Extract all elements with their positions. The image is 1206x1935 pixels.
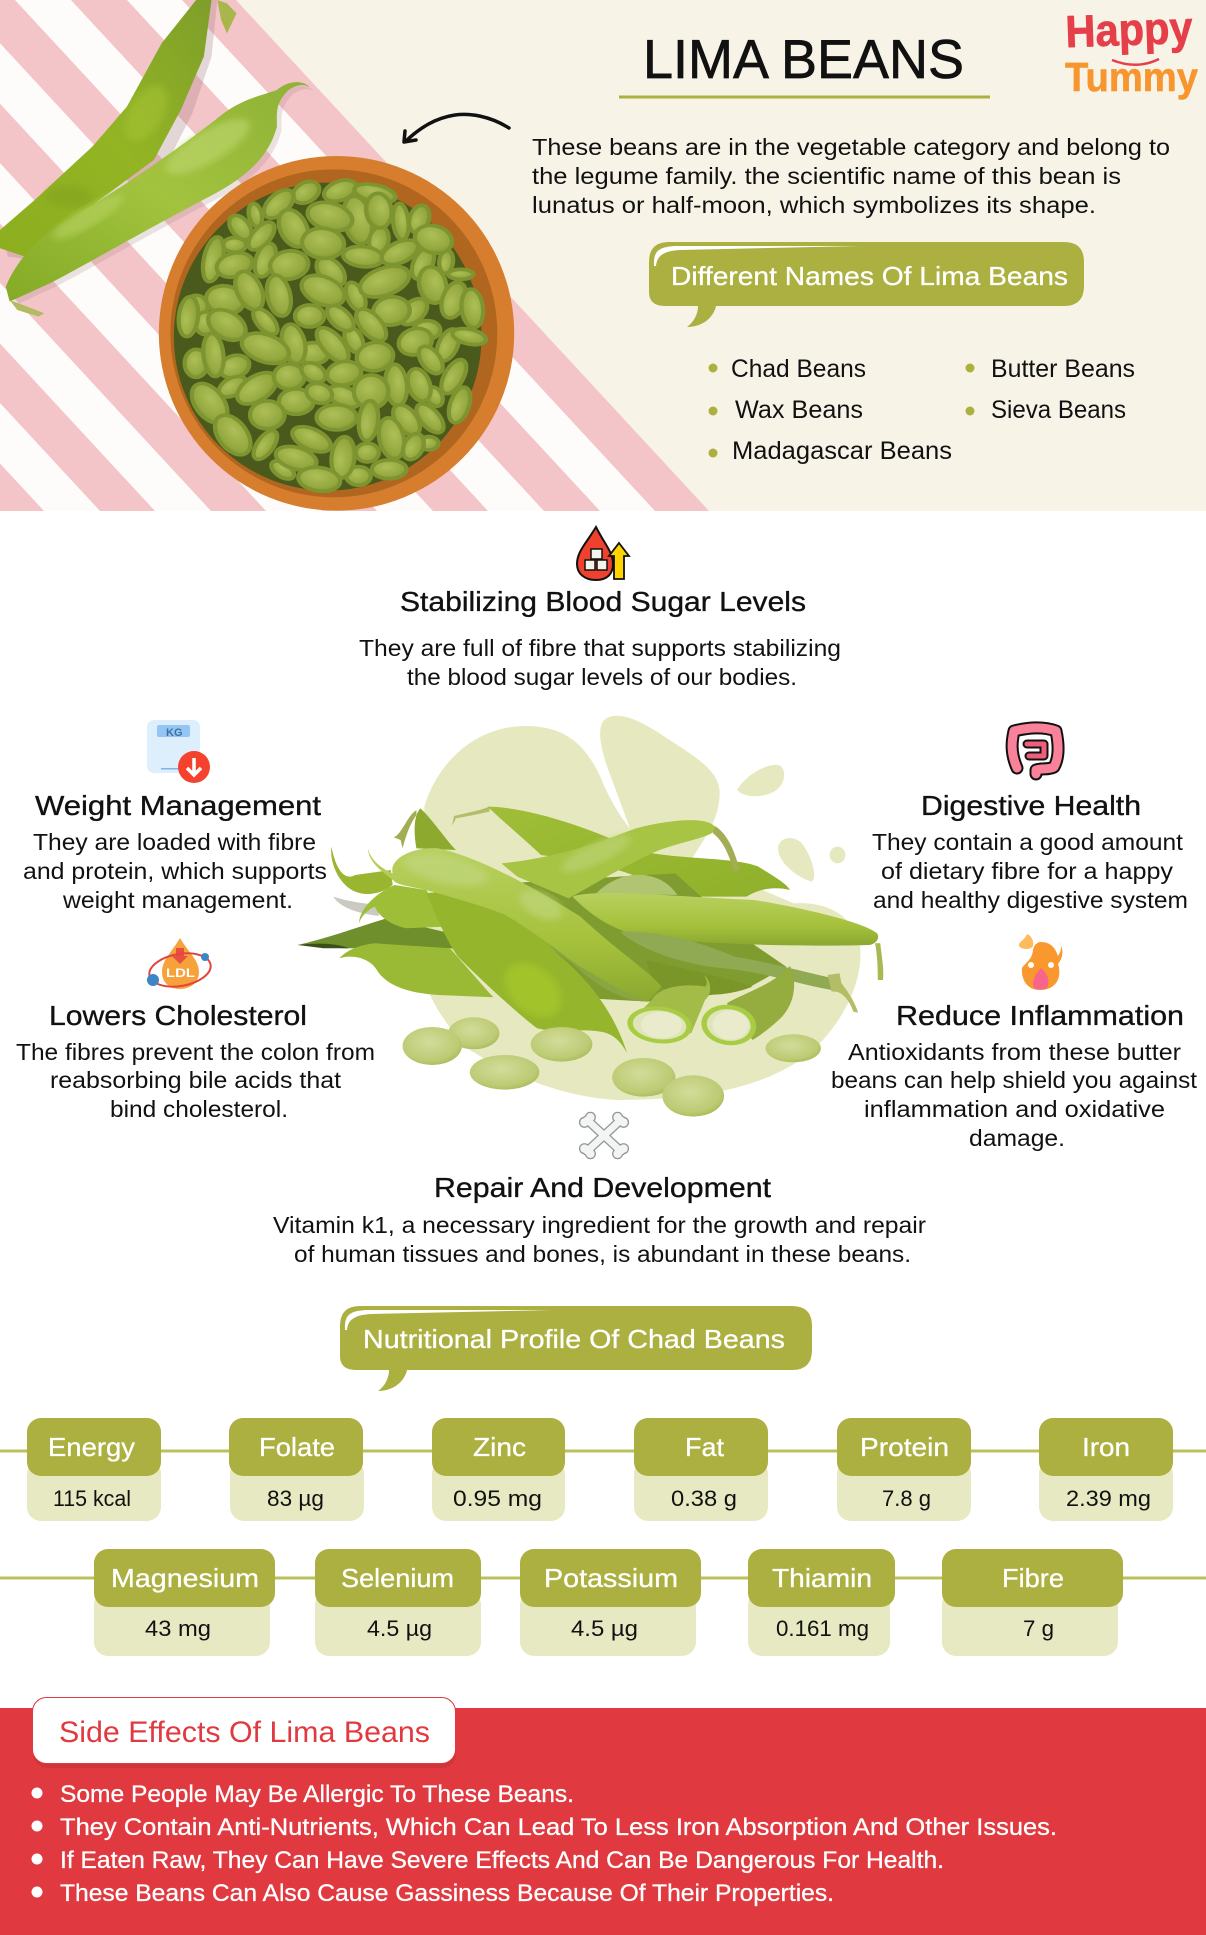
nutrient: zinc [432, 1418, 565, 1521]
image: bowl of lima beans [159, 156, 514, 511]
panel: side effects [0, 1698, 1206, 1935]
benefit: reduce inflammation: beans can help shield you against [831, 1067, 1197, 1093]
benefit: lowers cholesterol: The fibres prevent the colon from [16, 1039, 375, 1065]
intro text: These beans are in the vegetable category and belong to [532, 134, 1170, 160]
callout: different names [649, 242, 1084, 327]
title: LIMA BEANS [643, 28, 964, 90]
nutrient: energy: 115 kcal [53, 1486, 131, 1511]
nutrient: energy [27, 1418, 161, 1521]
nutrient: folate: Folate [259, 1432, 335, 1462]
benefit: digestive health: They contain a good amount [872, 829, 1183, 855]
benefit: reduce inflammation: damage. [969, 1125, 1065, 1151]
nutrient: fat: 0.38 g [671, 1486, 737, 1511]
list: bean names [708, 355, 1135, 465]
benefit: reduce inflammation [831, 934, 1197, 1151]
nutrient: selenium [315, 1549, 481, 1656]
nutrient: selenium: 4.5 µg [367, 1616, 432, 1641]
benefit: weight management: They are loaded with fibre [33, 829, 316, 855]
list: bean names: Sieva Beans [991, 396, 1126, 424]
benefit: digestive health: and healthy digestive system [873, 887, 1188, 913]
nutrient: protein [837, 1418, 971, 1521]
nutrient: protein: Protein [860, 1432, 949, 1462]
nutrition row 2 [0, 1549, 1206, 1656]
nutrient: zinc: 0.95 mg [453, 1486, 542, 1511]
intro text: the legume family. the scientific name of this bean is [532, 163, 1121, 189]
nutrient: thiamin: 0.161 mg [776, 1616, 869, 1641]
nutrient: fibre [942, 1549, 1123, 1656]
nutrient: potassium: 4.5 µg [571, 1616, 638, 1641]
image: two green bean pods [0, 0, 314, 317]
list: bean names: Butter Beans [991, 355, 1135, 383]
icon: LDL drop [147, 938, 213, 991]
intro text: lunatus or half-moon, which symbolizes its shape. [532, 192, 1096, 218]
intro text [532, 134, 1170, 218]
nutrient: fibre: 7 g [1023, 1616, 1054, 1641]
list: bean names: Wax Beans [735, 396, 863, 424]
icon: intestines [1012, 728, 1058, 774]
logo: Happy Tummy: Happy [1065, 2, 1193, 57]
list: side effects: They Contain Anti-Nutrients, Which Can Lead To Less Iron Absorption And Other Issues. [60, 1814, 1057, 1841]
icon: LDL drop: LDL [166, 966, 195, 980]
icon: weighing scale [147, 720, 210, 783]
benefit: digestive health: of dietary fibre for a happy [881, 858, 1173, 884]
nutrient: selenium: Selenium [341, 1563, 454, 1593]
benefit: lowers cholesterol [16, 938, 375, 1122]
nutrient: iron: Iron [1082, 1432, 1130, 1462]
heading: side effects: Side Effects Of Lima Beans [59, 1716, 430, 1749]
nutrient: thiamin [748, 1549, 895, 1656]
logo: Happy Tummy [1065, 2, 1198, 100]
nutrient: magnesium [94, 1549, 275, 1656]
benefit: repair and development: Repair And Development [434, 1172, 771, 1203]
icon: crossed bones [579, 1112, 629, 1159]
nutrient: zinc: Zinc [473, 1432, 526, 1462]
benefit: repair and development: Vitamin k1, a necessary ingredient for the growth and repair [273, 1212, 926, 1238]
benefit: lowers cholesterol: reabsorbing bile acids that [50, 1067, 341, 1093]
logo: Happy Tummy: Tummy [1065, 54, 1198, 100]
arrow [404, 114, 509, 142]
heading: side effects [32, 1698, 456, 1764]
callout: different names: Different Names Of Lima Beans [671, 261, 1068, 291]
nutrient: fat [634, 1418, 768, 1521]
list: bean names: Madagascar Beans [732, 437, 952, 465]
callout: nutritional profile: Nutritional Profile Of Chad Beans [363, 1324, 785, 1354]
benefit: weight management: weight management. [62, 887, 293, 913]
benefit: reduce inflammation: Reduce Inflammation [896, 1000, 1184, 1031]
nutrient: thiamin: Thiamin [772, 1563, 872, 1593]
nutrient: magnesium: 43 mg [145, 1616, 211, 1641]
benefit: stabilizing blood sugar [359, 527, 841, 690]
nutrient: folate: 83 µg [267, 1486, 324, 1511]
list: side effects: If Eaten Raw, They Can Have Severe Effects And Can Be Dangerous For Health. [60, 1847, 944, 1874]
benefit: stabilizing blood sugar: They are full of fibre that supports stabilizing [359, 635, 841, 661]
benefit: weight management: Weight Management [35, 790, 321, 821]
nutrient: magnesium: Magnesium [111, 1563, 259, 1593]
list: side effects: These Beans Can Also Cause Gassiness Because Of Their Properties. [60, 1880, 834, 1907]
nutrient: energy: Energy [48, 1432, 135, 1462]
benefit: digestive health [872, 728, 1188, 913]
image: central pile of lima beans with pale blob [298, 716, 883, 1117]
benefit: reduce inflammation: inflammation and oxidative [864, 1096, 1165, 1122]
nutrient: potassium: Potassium [544, 1563, 678, 1593]
benefit: digestive health: Digestive Health [921, 790, 1141, 821]
benefit: lowers cholesterol: Lowers Cholesterol [49, 1000, 307, 1031]
benefit: stabilizing blood sugar: the blood sugar levels of our bodies. [407, 664, 797, 690]
nutrient: potassium [520, 1549, 701, 1656]
benefit: stabilizing blood sugar: Stabilizing Blood Sugar Levels [400, 586, 806, 617]
nutrition row 1 [0, 1418, 1206, 1521]
nutrient: fibre: Fibre [1002, 1563, 1064, 1593]
list: bean names: Chad Beans [731, 355, 866, 383]
list: side effects [32, 1781, 1057, 1907]
benefit: lowers cholesterol: bind cholesterol. [110, 1096, 288, 1122]
callout: nutritional profile [340, 1306, 812, 1391]
panel: header background [0, 0, 1206, 511]
icon: weighing scale: KG [166, 727, 182, 739]
benefit: weight management: and protein, which supports [23, 858, 327, 884]
icon: flame [1019, 934, 1062, 990]
nutrient: iron: 2.39 mg [1066, 1486, 1151, 1511]
benefit: repair and development [273, 1112, 926, 1267]
nutrient: iron [1039, 1418, 1173, 1521]
benefit: weight management [23, 720, 327, 913]
list: side effects: Some People May Be Allergic To These Beans. [60, 1781, 574, 1808]
benefit: reduce inflammation: Antioxidants from these butter [848, 1039, 1181, 1065]
benefit: repair and development: of human tissues and bones, is abundant in these beans. [294, 1241, 911, 1267]
icon: blood drop with sugar cubes and up arrow [577, 527, 629, 580]
nutrient: fat: Fat [685, 1432, 725, 1462]
nutrient: protein: 7.8 g [882, 1486, 931, 1511]
nutrient: folate [229, 1418, 364, 1521]
